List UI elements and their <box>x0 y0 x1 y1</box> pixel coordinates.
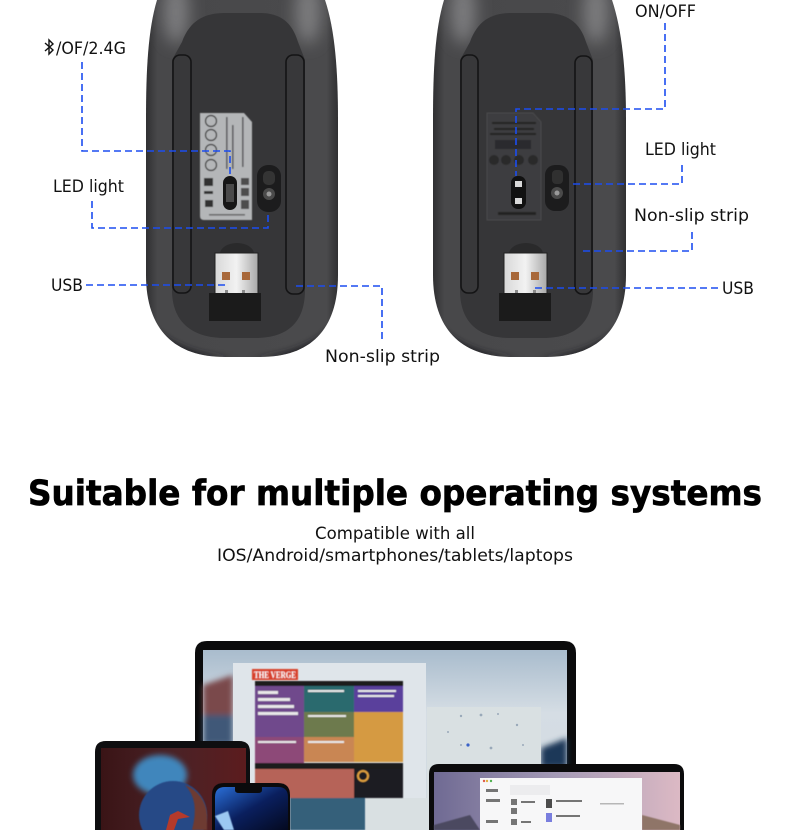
callout: non-slip strip left <box>296 286 440 367</box>
non-slip strip right <box>575 56 592 294</box>
news page <box>233 669 403 830</box>
usb receiver <box>209 243 261 321</box>
device: desktop monitor <box>195 641 576 830</box>
panel: left mouse underside <box>146 0 338 357</box>
icon: bluetooth <box>45 40 53 54</box>
callout: LED light right: LED light <box>645 140 716 160</box>
non-slip strip right <box>286 55 304 294</box>
body highlights <box>146 0 338 357</box>
printed label <box>487 113 541 220</box>
callout: bluetooth switch left: /OF/2.4G <box>56 39 126 59</box>
browser window <box>233 663 426 798</box>
inner panel <box>460 13 593 338</box>
artwork: dancer <box>133 755 207 830</box>
callout: USB right: USB <box>722 279 754 299</box>
mouse body <box>433 0 626 357</box>
callout: LED light right <box>571 140 716 184</box>
callout: non-slip strip left: Non-slip strip <box>325 347 440 367</box>
non-slip strip left <box>173 55 191 293</box>
callout: LED light left <box>53 177 268 228</box>
power switch <box>223 176 237 210</box>
body highlights <box>433 0 626 357</box>
callout: non-slip strip right: Non-slip strip <box>634 206 749 226</box>
panel: right mouse underside <box>433 0 626 357</box>
callout: LED light left: LED light <box>53 177 124 197</box>
file manager window <box>480 778 642 830</box>
optical sensor <box>545 165 569 211</box>
subheading: Compatible with all <box>315 524 475 544</box>
map window <box>365 707 541 830</box>
inner panel <box>172 13 305 338</box>
callout: ON/OFF right <box>516 2 696 176</box>
callout: ON/OFF right: ON/OFF <box>635 2 696 22</box>
callout: bluetooth switch left <box>45 39 230 176</box>
usb receiver <box>499 243 551 321</box>
product label <box>200 113 252 220</box>
device: smartphone <box>212 783 290 830</box>
subheading <box>217 524 573 566</box>
subheading: IOS/Android/smartphones/tablets/laptops <box>217 546 573 566</box>
non-slip strip left <box>461 55 478 293</box>
optical sensor <box>257 165 281 212</box>
callout: non-slip strip right <box>581 206 749 251</box>
device: laptop <box>429 764 684 830</box>
device: tablet <box>95 741 250 830</box>
news page: THE VERGE <box>254 670 296 680</box>
mouse body <box>146 0 338 357</box>
power switch <box>511 176 526 209</box>
callout: USB left: USB <box>51 276 83 296</box>
